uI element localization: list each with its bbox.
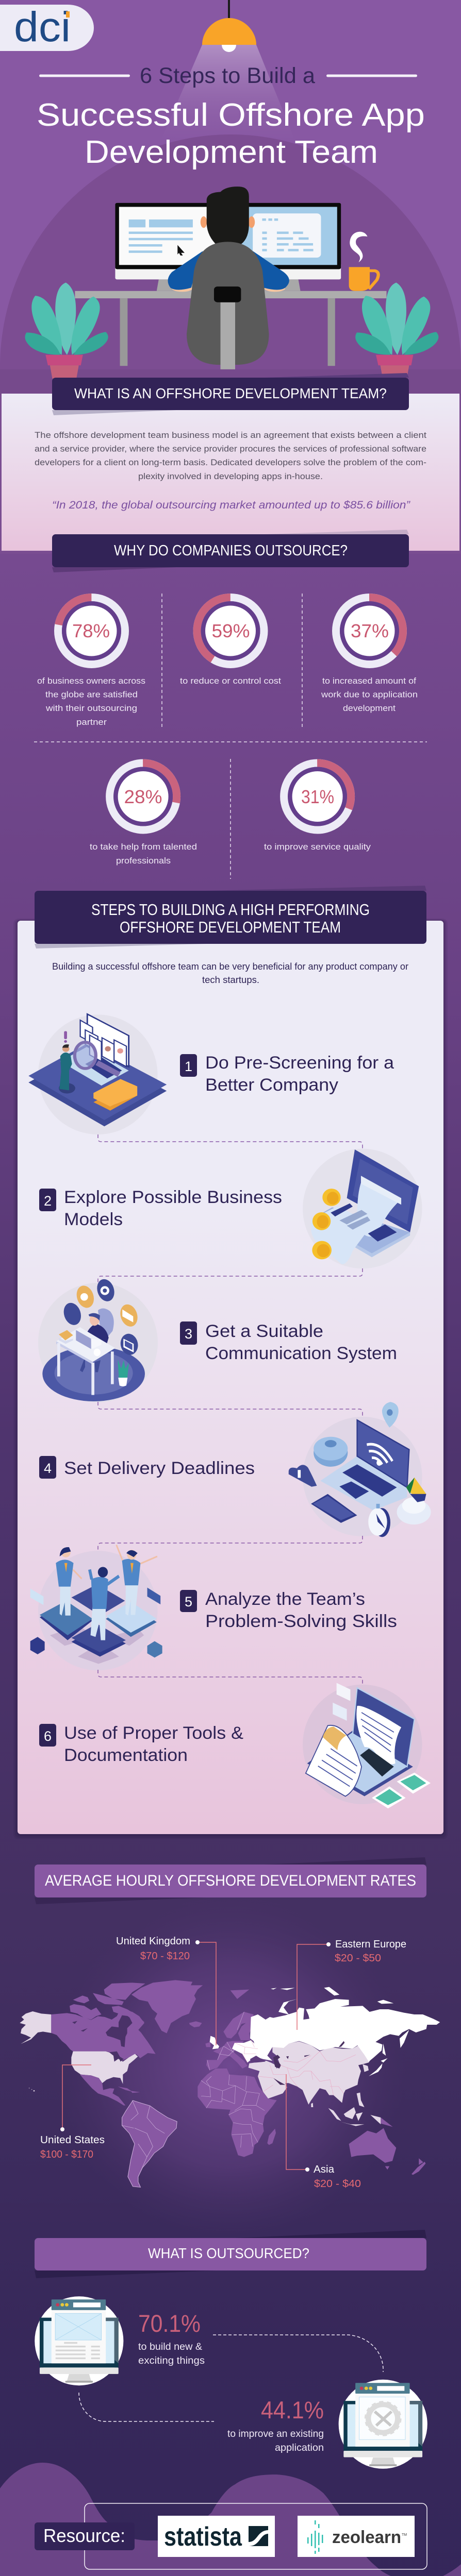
callout: united states rate bbox=[40, 2065, 105, 2160]
title: 6 Steps to Build a bbox=[140, 63, 315, 88]
person bbox=[168, 187, 289, 292]
step 3: Get a Suitable bbox=[205, 1321, 323, 1341]
step 1 bbox=[180, 1053, 394, 1095]
icon: wireframe monitor bbox=[35, 2296, 123, 2385]
bottom background blob bbox=[0, 2463, 461, 2576]
callout: united kingdom rate bbox=[116, 1936, 216, 2045]
panel: outsourcing stats bbox=[34, 585, 427, 879]
heading banner: what is outsourced bbox=[35, 2230, 426, 2278]
title: Development Team bbox=[85, 134, 378, 170]
person left bbox=[56, 1547, 81, 1616]
stat: 78%: partner bbox=[76, 717, 107, 727]
illustration: problem solving team bbox=[30, 1545, 162, 1670]
step 5: Analyze the Team’s bbox=[205, 1589, 365, 1609]
step 3: Communication System bbox=[205, 1344, 397, 1363]
illustration: tools and documentation bbox=[303, 1683, 431, 1808]
stat: 37% bbox=[321, 598, 418, 713]
heading banner: average hourly rates: AVERAGE HOURLY OFFSHORE DEVELOPMENT RATES bbox=[45, 1872, 416, 1889]
resource label bbox=[35, 2522, 135, 2550]
step 6 bbox=[39, 1723, 243, 1765]
callout: asia rate bbox=[286, 2074, 361, 2190]
callout: asia rate: $20 - $40 bbox=[314, 2178, 361, 2190]
heading banner: what is outsourced: WHAT IS OUTSOURCED? bbox=[148, 2245, 309, 2261]
stat: 78% bbox=[37, 591, 145, 727]
stat: 37%: 37% bbox=[351, 620, 389, 641]
heading banner: why do companies outsource: WHY DO COMPANIES OUTSOURCE? bbox=[114, 543, 348, 559]
stat: 44.1%: 44.1% bbox=[261, 2396, 324, 2424]
resource box outline bbox=[85, 2503, 427, 2569]
stat: 44.1% bbox=[227, 2396, 324, 2453]
text block: offshore definition: and a service provider, where the service provider procures the services of professional software bbox=[35, 444, 426, 453]
stat: 70.1%: exciting things bbox=[138, 2355, 205, 2366]
heading banner: what is an offshore development team: WHAT IS AN OFFSHORE DEVELOPMENT TEAM? bbox=[74, 385, 387, 401]
step 3 bbox=[180, 1321, 397, 1363]
heading banner: average hourly rates bbox=[35, 1857, 426, 1904]
text block: steps intro: Building a successful offshore team can be very beneficial for any product company or bbox=[52, 961, 408, 972]
text block: steps intro bbox=[52, 961, 408, 985]
world map bbox=[20, 1980, 440, 2187]
stat: 37%: to increased amount of bbox=[322, 676, 416, 686]
stat: 31%: 31% bbox=[301, 786, 334, 807]
step 4: Set Delivery Deadlines bbox=[64, 1459, 255, 1478]
heading banner: steps to building: OFFSHORE DEVELOPMENT TEAM bbox=[120, 918, 341, 936]
text block: offshore definition: The offshore development team business model is an agreement that exists between a client bbox=[35, 430, 426, 440]
illustration: delivery deadlines bbox=[289, 1402, 431, 1537]
icon: settings monitor bbox=[339, 2380, 427, 2469]
connector: 4 to 5 bbox=[98, 1536, 363, 1550]
stat: 70.1% bbox=[138, 2310, 205, 2366]
step 2: Explore Possible Business bbox=[64, 1188, 282, 1207]
map: europe, africa, asia bbox=[197, 1987, 440, 2157]
callout: united kingdom rate: United Kingdom bbox=[116, 1936, 190, 1947]
illustration: communication system bbox=[38, 1277, 158, 1402]
stat: 78%: with their outsourcing bbox=[45, 703, 137, 713]
stat: 31% bbox=[264, 763, 371, 852]
step 6: Documentation bbox=[64, 1745, 188, 1765]
text block: offshore definition bbox=[35, 430, 426, 481]
text block: offshore definition: plexity involved in developing apps in-house. bbox=[138, 471, 323, 481]
connector: 1 to 2 bbox=[98, 1134, 363, 1149]
chair bbox=[187, 242, 269, 369]
callout: eastern europe rate: $20 - $50 bbox=[335, 1953, 381, 1964]
connector: 5 to 6 bbox=[98, 1670, 363, 1685]
logo: statista bbox=[158, 2516, 275, 2557]
logo: dci bbox=[0, 4, 94, 51]
step 5: Problem-Solving Skills bbox=[205, 1612, 397, 1631]
connector: 3 to 4 bbox=[98, 1402, 363, 1417]
coffee mug bbox=[349, 232, 378, 291]
stat: 28% bbox=[90, 763, 197, 866]
callout: eastern europe rate bbox=[297, 1939, 406, 2030]
map: north america bbox=[20, 1980, 203, 2106]
callout: eastern europe rate: Eastern Europe bbox=[335, 1939, 406, 1950]
step 1: Better Company bbox=[205, 1075, 338, 1095]
map: south america and australia bbox=[122, 2100, 425, 2187]
step 6: 6 bbox=[44, 1728, 52, 1744]
monitor bbox=[115, 203, 341, 291]
stat: 70.1%: to build new & bbox=[138, 2342, 202, 2352]
step 5: 5 bbox=[185, 1594, 192, 1609]
illustration: developer at desk bbox=[25, 187, 438, 379]
callout: united states rate: United States bbox=[40, 2134, 105, 2146]
logo: dci: dci bbox=[14, 4, 71, 50]
stat: 78%: of business owners across bbox=[37, 676, 145, 686]
stat: 37%: work due to application bbox=[321, 689, 418, 700]
step 1: 1 bbox=[185, 1059, 192, 1074]
step 3: 3 bbox=[185, 1326, 192, 1342]
stat: 37%: development bbox=[343, 703, 396, 713]
panel shadow bbox=[13, 919, 448, 1839]
text block: steps intro: tech startups. bbox=[202, 975, 259, 985]
plant left bbox=[25, 282, 108, 379]
heading banner: why do companies outsource bbox=[52, 530, 409, 572]
map glow bbox=[55, 1896, 406, 2236]
lamp light beam bbox=[160, 45, 295, 142]
floor band bbox=[0, 369, 461, 395]
step 2: 2 bbox=[44, 1193, 52, 1209]
text block: offshore definition: developers for a client on long-term basis. Dedicated developers solve the problem of the com- bbox=[35, 457, 426, 467]
stat: 70.1%: 70.1% bbox=[138, 2310, 201, 2337]
stat: 31%: to improve service quality bbox=[264, 842, 371, 852]
panel: what is an offshore team background bbox=[2, 394, 459, 551]
logo: zeolearn: TM bbox=[402, 2533, 407, 2537]
stat: 59%: 59% bbox=[211, 620, 250, 641]
stat: 28%: to take help from talented bbox=[90, 842, 197, 852]
stat: 59%: to reduce or control cost bbox=[180, 676, 281, 686]
stat: 28%: professionals bbox=[116, 856, 171, 866]
logo: statista: statista bbox=[164, 2522, 242, 2552]
stat: 44.1%: to improve an existing bbox=[227, 2429, 324, 2439]
quote: outsourcing market: “In 2018, the global outsourcing market amounted up to $85.6 billion” bbox=[52, 499, 410, 511]
stat: 78%: 78% bbox=[72, 620, 110, 641]
heading banner: what is an offshore development team bbox=[52, 373, 409, 415]
callout: united states rate: $100 - $170 bbox=[40, 2149, 93, 2160]
heading banner: steps to building bbox=[35, 886, 426, 948]
stat: 44.1%: application bbox=[275, 2443, 324, 2453]
plant right bbox=[355, 282, 438, 379]
heading banner: steps to building: STEPS TO BUILDING A HIGH PERFORMING bbox=[91, 901, 370, 919]
title: Successful Offshore App bbox=[37, 97, 425, 133]
desk bbox=[75, 291, 387, 366]
callout: asia rate: Asia bbox=[314, 2164, 335, 2175]
person right bbox=[117, 1545, 157, 1616]
stat: 78%: the globe are satisfied bbox=[45, 689, 138, 700]
title bbox=[37, 63, 425, 170]
icon: ceiling lamp bbox=[202, 0, 256, 52]
panel: steps bbox=[18, 921, 443, 1834]
illustration: pre-screening bbox=[28, 1014, 167, 1134]
logo: zeolearn: zeolearn bbox=[332, 2528, 401, 2547]
step 6: Use of Proper Tools & bbox=[64, 1723, 243, 1743]
resource label: Resource: bbox=[43, 2525, 125, 2546]
arrow: dashed curve to second monitor bbox=[213, 2335, 383, 2372]
connector: 2 to 3 bbox=[98, 1268, 363, 1283]
person middle bbox=[90, 1567, 119, 1640]
step 4: 4 bbox=[44, 1461, 52, 1476]
step 2: Models bbox=[64, 1210, 123, 1229]
callout: united kingdom rate: $70 - $120 bbox=[140, 1951, 190, 1962]
logo: zeolearn bbox=[298, 2516, 415, 2557]
stat: 59% bbox=[180, 585, 281, 686]
step 5 bbox=[180, 1589, 397, 1631]
step 1: Do Pre-Screening for a bbox=[205, 1053, 394, 1073]
background dome bbox=[0, 134, 461, 369]
stat: 28%: 28% bbox=[124, 786, 162, 807]
arrow: dashed curve back from first monitor bbox=[79, 2393, 214, 2421]
step 2 bbox=[39, 1188, 282, 1229]
illustration: business models bbox=[303, 1149, 422, 1268]
